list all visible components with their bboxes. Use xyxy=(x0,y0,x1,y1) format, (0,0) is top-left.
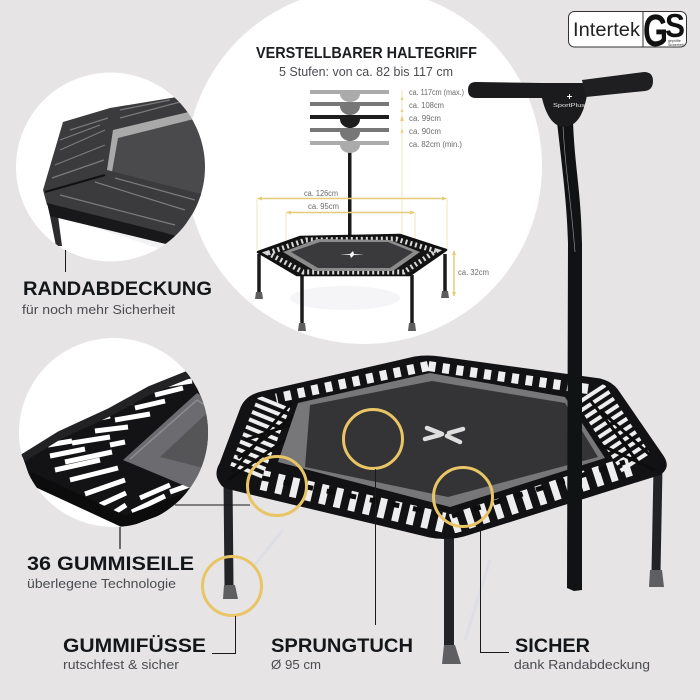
height labels: ca. 99cm xyxy=(409,114,441,123)
callout: edge cover xyxy=(22,279,212,317)
callout: jumping mat xyxy=(271,636,413,672)
panel: edge cover photo xyxy=(16,72,215,262)
height positions of the handle xyxy=(310,90,389,235)
handle brand xyxy=(553,94,585,109)
certification badge: geprüfte xyxy=(668,39,681,43)
callout: jumping mat: SPRUNGTUCH xyxy=(271,636,413,657)
main trampoline xyxy=(219,358,664,664)
certification badge: Intertek xyxy=(573,20,641,41)
callout: rubber feet: rutschfest & sicher xyxy=(63,658,179,672)
highlight circles xyxy=(202,410,492,616)
height labels: ca. 90cm xyxy=(409,127,441,136)
certification badge xyxy=(568,5,686,56)
rope band xyxy=(219,358,664,536)
frame tube xyxy=(219,358,664,536)
height labels: ca. 117cm (max.) xyxy=(409,88,464,97)
panel: rubber ropes photo xyxy=(19,338,215,527)
handle xyxy=(468,72,653,591)
handle brand: SportPlus xyxy=(553,103,585,109)
logo on mat xyxy=(425,428,463,442)
callout: jumping mat: Ø 95 cm xyxy=(271,658,321,672)
callout: rubber feet: GUMMIFÜSSE xyxy=(63,636,206,657)
certification badge: Sicherheit xyxy=(668,43,684,47)
width dimensions: ca. 126cm xyxy=(304,189,338,198)
callout: rubber ropes: 36 GUMMISEILE xyxy=(27,554,194,575)
certification badge: S xyxy=(665,7,685,44)
subheading: handle range: 5 Stufen: von ca. 82 bis 117 cm xyxy=(279,64,453,79)
width dimensions xyxy=(257,189,447,250)
certification badge: G xyxy=(643,5,668,56)
callout: safe: SICHER xyxy=(515,636,590,657)
leader lines xyxy=(66,250,509,654)
panel: adjustable handle diagram xyxy=(186,0,542,344)
height labels: ca. 108cm xyxy=(409,101,444,110)
callout: rubber ropes: überlegene Technologie xyxy=(27,577,176,591)
legs xyxy=(223,468,664,664)
callout: safe xyxy=(514,636,650,672)
callout: edge cover: für noch mehr Sicherheit xyxy=(22,303,176,317)
callout: rubber ropes xyxy=(27,554,194,591)
height dimension xyxy=(452,250,489,297)
height labels xyxy=(409,88,464,149)
jumping mat xyxy=(278,373,605,507)
height scale xyxy=(400,90,404,233)
height labels: ca. 82cm (min.) xyxy=(409,140,462,149)
callout: safe: dank Randabdeckung xyxy=(514,658,650,672)
width dimensions: ca. 95cm xyxy=(308,202,339,211)
callout: rubber feet xyxy=(63,636,206,672)
height dimension: ca. 32cm xyxy=(458,268,489,277)
heading: adjustable handle: VERSTELLBARER HALTEGRIFF xyxy=(256,45,477,62)
callout: edge cover: RANDABDECKUNG xyxy=(23,279,212,300)
mini trampoline xyxy=(255,235,449,331)
floor shadows xyxy=(253,530,490,640)
